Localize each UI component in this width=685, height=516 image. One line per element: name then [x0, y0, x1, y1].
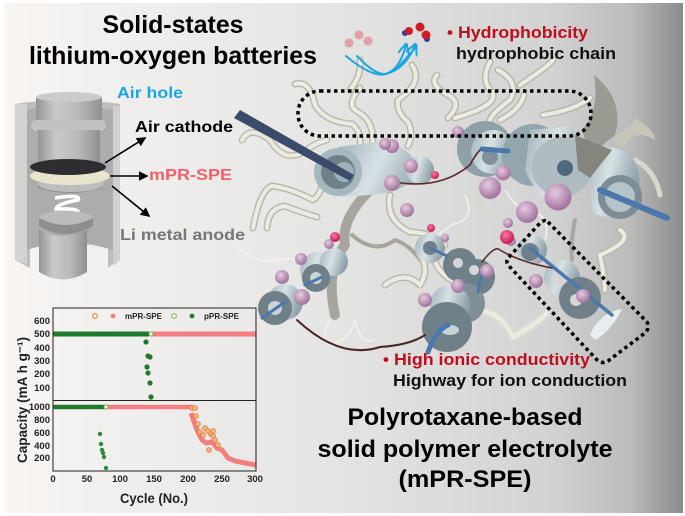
- lithium ions: [275, 126, 590, 307]
- text: polyrotaxane heading: (mPR-SPE): [398, 466, 532, 493]
- arrow: to mPR-SPE: [110, 175, 147, 177]
- y axis labels: 200: [34, 369, 50, 380]
- arrow: to Li metal anode: [112, 186, 149, 216]
- polymer axles: [234, 110, 667, 352]
- text: hydrophobicity: Hydrophobicity: [458, 23, 589, 42]
- illustration: lithium-oxygen cell: [15, 92, 120, 280]
- text: high ionic conductivity: High ionic conductivity: [394, 350, 591, 369]
- text: hydrophobicity: hydrophobic chain: [456, 44, 616, 63]
- text: high ionic conductivity: [383, 350, 627, 390]
- lower plot data: [53, 405, 256, 470]
- text: polyrotaxane heading: solid polymer electrolyte: [318, 436, 612, 463]
- label: Li metal anode: Li metal anode: [120, 227, 245, 244]
- cyclodextrin ring: top left cylinder: [314, 141, 434, 197]
- y axis labels: 300: [34, 356, 50, 367]
- x axis title: Cycle (No.): [120, 491, 188, 506]
- hydrophobic ribbons: [235, 60, 660, 345]
- upper plot data: [53, 332, 256, 400]
- dotted outline: ion conduction highway: [507, 221, 648, 362]
- chart: capacity vs cycle: [14, 308, 263, 506]
- cyclodextrin ring: top middle: [457, 121, 515, 177]
- y axis labels: 600: [34, 316, 50, 327]
- text: polyrotaxane heading: Polyrotaxane-based: [348, 404, 582, 431]
- y axis labels: 200: [34, 453, 50, 464]
- y axis labels: 500: [34, 329, 50, 340]
- x axis labels: 200: [180, 474, 196, 485]
- label: air hole: Air hole: [117, 85, 183, 102]
- x axis labels: 300: [247, 474, 263, 485]
- y axis title: Capacity (mA h g⁻¹): [14, 337, 30, 463]
- text: high ionic conductivity: Highway for ion conduction: [393, 371, 627, 390]
- molecular structure: polyrotaxane: [234, 60, 667, 352]
- title: lithium-oxygen batteries: [29, 42, 317, 70]
- title: [29, 11, 317, 70]
- x axis labels: 150: [146, 474, 162, 485]
- label: mPR-SPE: mPR-SPE: [149, 167, 232, 184]
- y axis labels: 400: [34, 343, 50, 354]
- cyclodextrin ring: top right cylinder: [502, 124, 642, 219]
- legend: pPR-SPE: [204, 312, 240, 321]
- text: high ionic conductivity: •: [383, 350, 389, 369]
- y axis labels: 600: [34, 428, 50, 439]
- plot frame: [53, 308, 256, 471]
- icon: water molecules repelled: [344, 22, 430, 48]
- text: hydrophobicity: •: [447, 23, 453, 42]
- cyclodextrin rings: centre: [415, 233, 495, 352]
- title: Solid-states: [102, 11, 244, 39]
- x axis labels: 250: [214, 474, 230, 485]
- x axis labels: 0: [50, 474, 56, 485]
- y axis labels: 400: [34, 441, 50, 452]
- y axis labels: [29, 316, 50, 464]
- text: hydrophobicity: [447, 23, 616, 63]
- x axis labels: 50: [82, 474, 92, 485]
- y axis labels: 100: [34, 383, 50, 394]
- y axis labels: 800: [34, 415, 50, 426]
- arrow: to air cathode: [105, 138, 145, 163]
- x axis labels: 100: [112, 474, 128, 485]
- label: air cathode: Air cathode: [135, 119, 233, 136]
- cyclodextrin rings: highway region: [517, 235, 622, 340]
- y axis labels: 1000: [29, 402, 50, 413]
- x axis labels: [50, 474, 263, 485]
- dotted outline: hydrophobic region: [298, 91, 591, 136]
- text: polyrotaxane heading: [318, 404, 612, 493]
- arrows: water deflected: [346, 45, 417, 75]
- legend: mPR-SPE: [125, 312, 163, 321]
- legend: [93, 312, 240, 321]
- cyclodextrin rings: lower left: [258, 248, 348, 325]
